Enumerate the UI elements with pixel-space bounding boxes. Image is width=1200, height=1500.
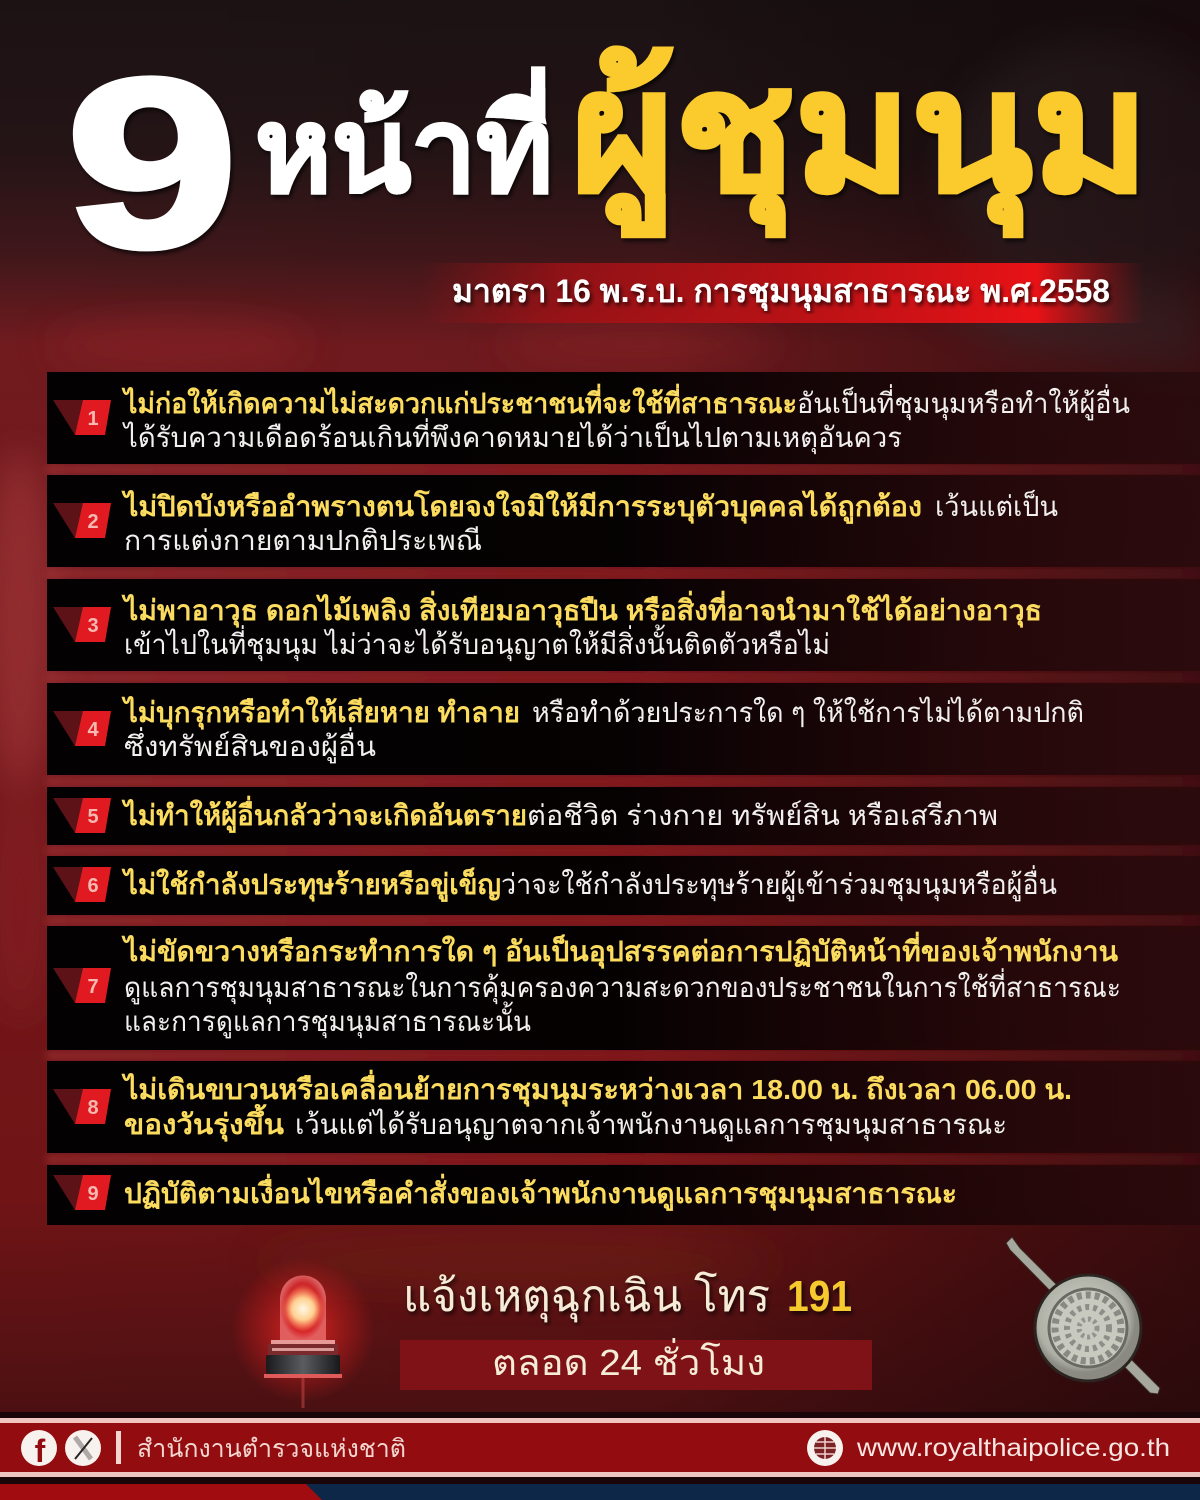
rule 2: ไม่ปิดบังหรืออำพรางตนโดยจงใจมิให้มีการระบุตัวบุคคลได้ถูกต้อง bbox=[121, 489, 922, 524]
rule 5: ไม่ทำให้ผู้อื่นกลัวว่าจะเกิดอันตราย bbox=[121, 795, 527, 833]
rule 5 bbox=[47, 787, 1200, 845]
rule 1: อันเป็นที่ชุมนุมหรือทำให้ผู้อื่น bbox=[797, 384, 1130, 421]
rule 7: 7 bbox=[87, 976, 99, 998]
rule 4 bbox=[47, 683, 1200, 775]
rule 6: ว่าจะใช้กำลังประทุษร้ายผู้เข้าร่วมชุมนุมหรือผู้อื่น bbox=[501, 865, 1057, 902]
rule 3: เข้าไปในที่ชุมนุม ไม่ว่าจะได้รับอนุญาตให้มีสิ่งนั้นติดตัวหรือไม่ bbox=[124, 624, 830, 662]
emergency call text: แจ้งเหตุฉุกเฉิน โทร bbox=[403, 1271, 770, 1323]
rule 1: 1 bbox=[87, 408, 99, 430]
emergency number: 191 bbox=[787, 1272, 852, 1321]
rule 5: ต่อชีวิต ร่างกาย ทรัพย์สิน หรือเสรีภาพ bbox=[527, 800, 998, 831]
rule 8: 8 bbox=[87, 1097, 99, 1119]
title white text: หน้าที่ bbox=[255, 68, 553, 217]
rule 9: ปฏิบัติตามเงื่อนไขหรือคำสั่งของเจ้าพนักงานดูแลการชุมนุมสาธารณะ bbox=[124, 1173, 957, 1211]
website: www.royalthaipolice.go.th bbox=[856, 1434, 1170, 1462]
24 hours box bbox=[400, 1338, 872, 1390]
rule 3: ไม่พาอาวุธ ดอกไม้เพลิง สิ่งเทียมอาวุธปืน หรือสิ่งที่อาจนำมาใช้ได้อย่างอาวุธ bbox=[121, 590, 1042, 628]
title yellow text: ผู้ชุมนุม bbox=[571, 38, 1149, 237]
icon: police shield and sword bbox=[1006, 1237, 1160, 1394]
rule 8: เว้นแต่ได้รับอนุญาตจากเจ้าพนักงานดูแลการชุมนุมสาธารณะ bbox=[295, 1109, 1007, 1142]
title number: 9 bbox=[66, 29, 238, 297]
rule 4: 4 bbox=[87, 719, 99, 741]
subtitle ribbon bbox=[420, 263, 1145, 323]
icon: globe bbox=[807, 1430, 843, 1466]
rule 6: 6 bbox=[87, 875, 99, 897]
rule 4: ไม่บุกรุกหรือทำให้เสียหาย ทำลาย bbox=[121, 696, 520, 730]
rule 8: ไม่เดินขบวนหรือเคลื่อนย้ายการชุมนุมระหว่างเวลา 18.00 น. ถึงเวลา 06.00 น. bbox=[121, 1069, 1072, 1107]
rule 1: ไม่ก่อให้เกิดความไม่สะดวกแก่ประชาชนที่จะใช้ที่สาธารณะ bbox=[121, 383, 797, 419]
agency name: สำนักงานตำรวจแห่งชาติ bbox=[137, 1435, 406, 1463]
rule 1 bbox=[47, 372, 1200, 464]
rule 2 bbox=[47, 475, 1200, 567]
divider bbox=[116, 1431, 121, 1464]
rule 2: การแต่งกายตามปกติประเพณี bbox=[124, 525, 482, 556]
subtitle text: มาตรา 16 พ.ร.บ. การชุมนุมสาธารณะ พ.ศ.2558 bbox=[452, 273, 1110, 312]
rule 8: ของวันรุ่งขึ้น bbox=[124, 1103, 284, 1142]
rule 6 bbox=[47, 856, 1200, 915]
rule 5: 5 bbox=[87, 806, 99, 828]
rule 3: 3 bbox=[87, 615, 99, 637]
rule 4: ซึ่งทรัพย์สินของผู้อื่น bbox=[124, 727, 376, 764]
rule 7: ไม่ขัดขวางหรือกระทำการใด ๆ อันเป็นอุปสรรคต่อการปฏิบัติหน้าที่ของเจ้าพนักงาน bbox=[121, 931, 1118, 969]
rule 1: ได้รับความเดือดร้อนเกินที่พึงคาดหมายได้ว่าเป็นไปตามเหตุอันควร bbox=[122, 418, 902, 455]
icon: facebook: f bbox=[35, 1433, 46, 1469]
rule 7: ดูแลการชุมนุมสาธารณะในการคุ้มครองความสะดวกของประชาชนในการใช้ที่สาธารณะ bbox=[124, 968, 1121, 1005]
footer bar bbox=[0, 1412, 1200, 1500]
icon: X bbox=[65, 1430, 101, 1466]
rule 7 bbox=[47, 926, 1200, 1050]
rule 6: ไม่ใช้กำลังประทุษร้ายหรือขู่เข็ญ bbox=[121, 867, 501, 902]
row gap highlights bbox=[47, 465, 1200, 1164]
rule 2: 2 bbox=[87, 511, 99, 533]
icon: facebook bbox=[21, 1430, 57, 1469]
title bbox=[66, 29, 1149, 297]
rule 4: หรือทำด้วยประการใด ๆ ให้ใช้การไม่ได้ตามปกติ bbox=[532, 696, 1084, 728]
24 hours box: ตลอด 24 ชั่วโมง bbox=[492, 1338, 765, 1383]
rule 3 bbox=[47, 579, 1200, 671]
rule 9 bbox=[47, 1165, 1200, 1225]
rule 7: และการดูแลการชุมนุมสาธารณะนั้น bbox=[124, 1001, 531, 1039]
rule 8 bbox=[47, 1061, 1200, 1153]
rule 2: เว้นแต่เป็น bbox=[935, 489, 1058, 522]
rule 9: 9 bbox=[87, 1183, 99, 1205]
icon: red siren bbox=[231, 1258, 375, 1408]
